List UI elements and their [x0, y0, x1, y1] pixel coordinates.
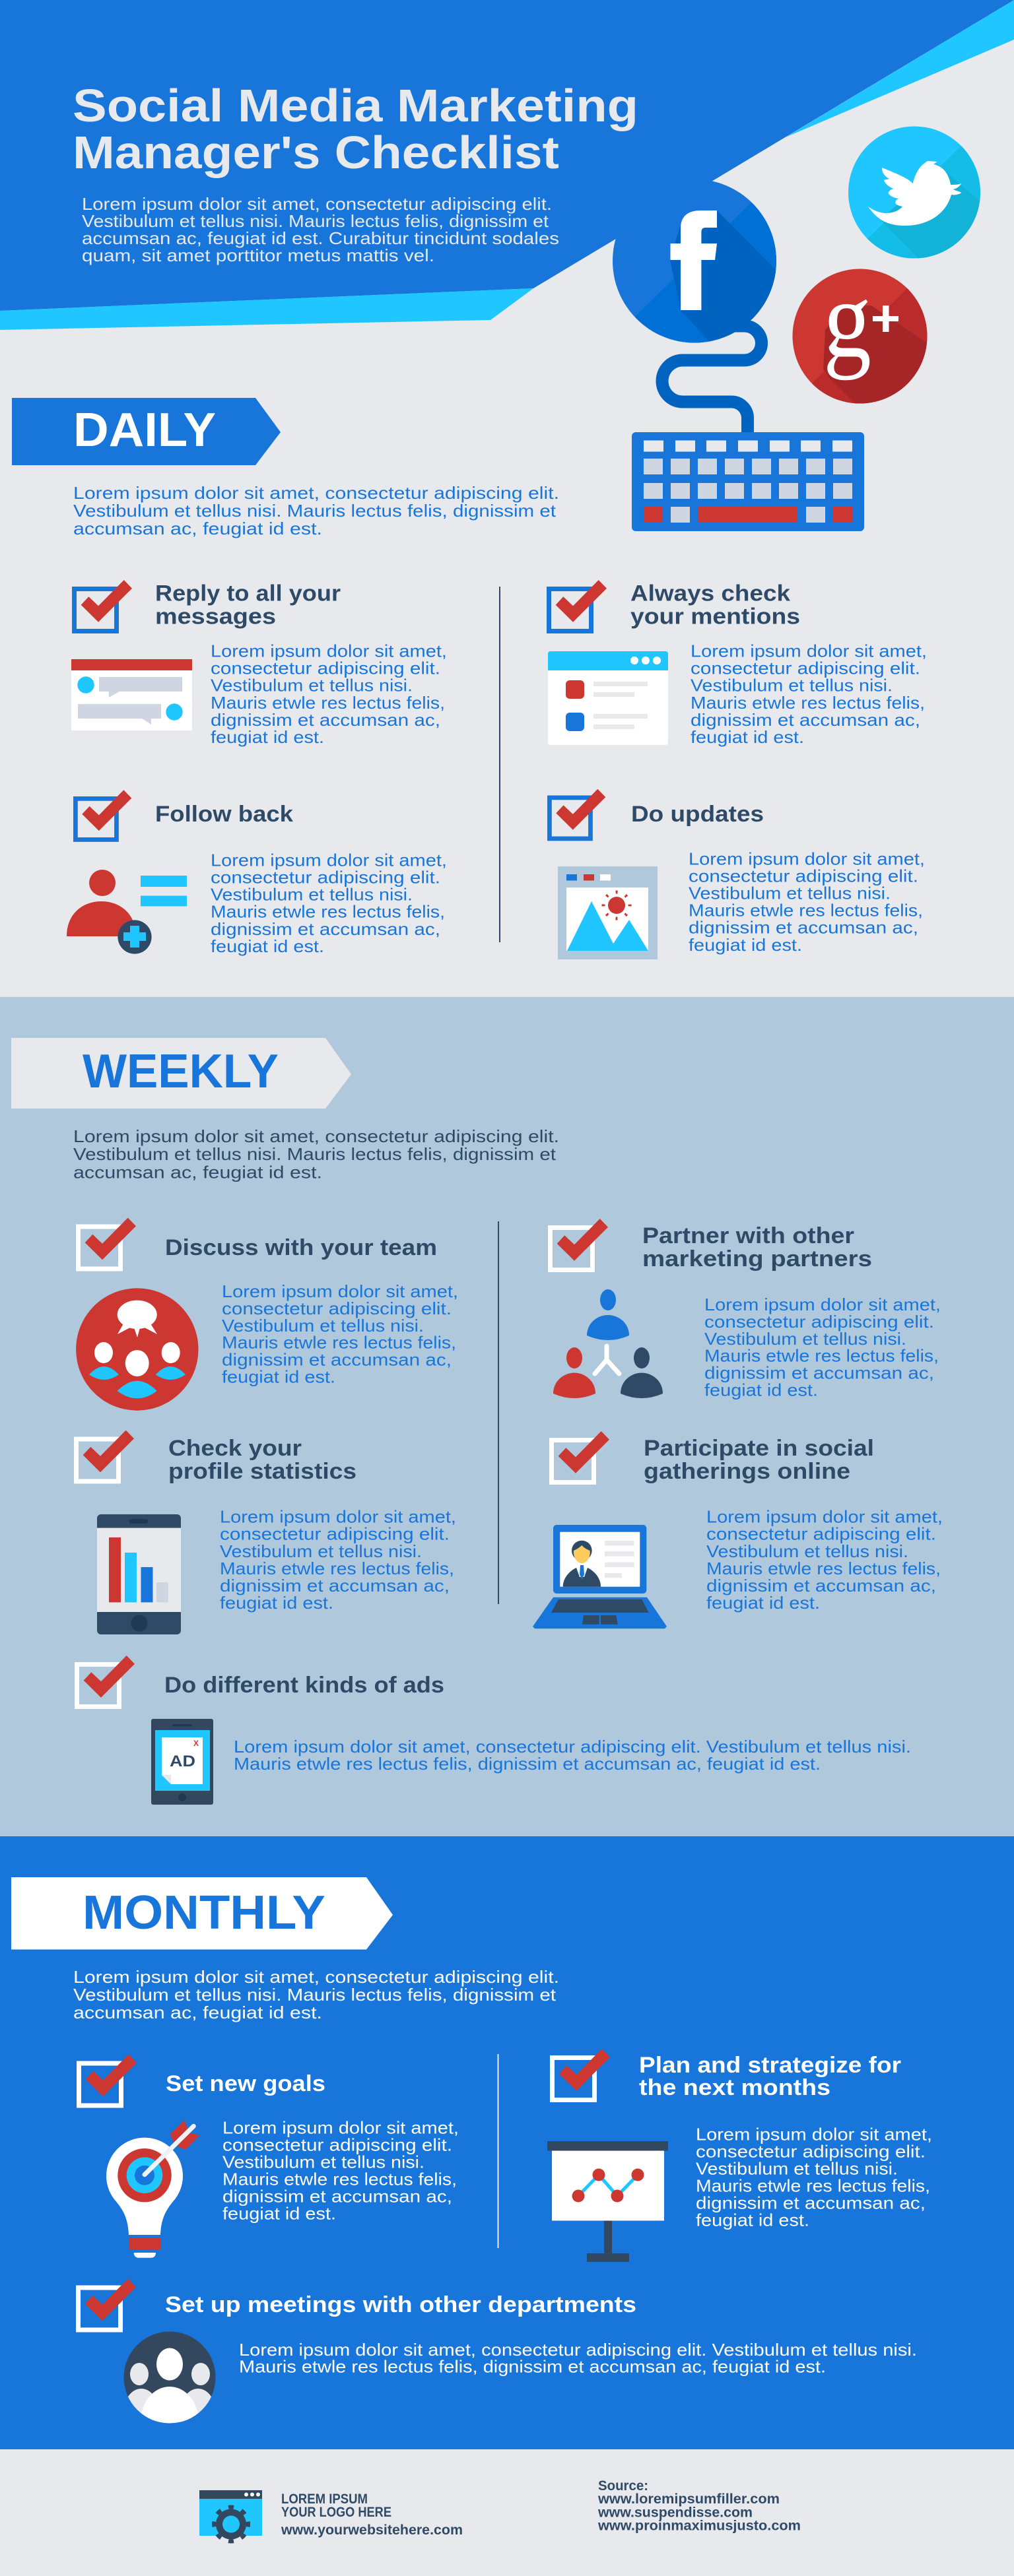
heading: Follow back [155, 802, 293, 827]
item: do updates [549, 789, 925, 959]
weekly intro text: accumsan ac, feugiat id est. [73, 1163, 322, 1182]
body text: Mauris etwle res lectus felis, [211, 902, 445, 922]
heading: Set new goals [166, 2071, 325, 2096]
daily intro text: accumsan ac, feugiat id est. [73, 519, 322, 538]
banner: weekly [11, 1038, 351, 1109]
title [73, 80, 638, 178]
body text: feugiat id est. [222, 2204, 336, 2224]
body text: Lorem ipsum dolor sit amet, [211, 850, 447, 870]
heading: gatherings online [644, 1459, 850, 1484]
body text: Mauris etwle res lectus felis, [220, 1559, 454, 1578]
body text: dignissim et accumsan ac, [211, 919, 440, 939]
title: Manager's Checklist [73, 127, 559, 178]
body text: Lorem ipsum dolor sit amet, consectetur adipiscing elit. Vestibulum et tellus nisi. [239, 2340, 917, 2360]
body text: Mauris etwle res lectus felis, [704, 1346, 939, 1366]
checkbox [78, 2279, 136, 2330]
body text: feugiat id est. [689, 935, 802, 955]
heading [168, 1436, 356, 1484]
checkbox [549, 580, 607, 631]
heading [639, 2053, 901, 2100]
monthly intro text: Lorem ipsum dolor sit amet, consectetur adipiscing elit. [73, 1967, 559, 1987]
heading: Do different kinds of ads [164, 1673, 444, 1698]
body text [704, 1295, 941, 1400]
icon: chat window [71, 659, 192, 730]
header intro text: accumsan ac, feugiat id est. Curabitur tincidunt sodales [82, 228, 559, 248]
body text: feugiat id est. [691, 727, 804, 747]
icon: partners network [553, 1289, 663, 1398]
icon: logo gear window [199, 2490, 262, 2542]
heading: Check your [168, 1436, 302, 1461]
heading: Partner with other [642, 1223, 854, 1248]
weekly intro text [73, 1126, 559, 1182]
body text: Lorem ipsum dolor sit amet, [704, 1295, 941, 1314]
heading [644, 1436, 874, 1484]
body text: Lorem ipsum dolor sit amet, [691, 641, 927, 661]
item: set up meetings with other departments [76, 2279, 915, 2423]
icon: phone with ad: X [193, 1739, 199, 1748]
icon: laptop with profile [533, 1525, 667, 1628]
header blue shape [0, 0, 1014, 311]
body text: Lorem ipsum dolor sit amet, [222, 2118, 459, 2138]
weekly intro text: Vestibulum et tellus nisi. Mauris lectus felis, dignissim et [73, 1144, 557, 1164]
banner: daily: DAILY [73, 404, 216, 457]
body text: dignissim et accumsan ac, [222, 2187, 452, 2206]
logo text [281, 2492, 463, 2538]
daily intro text [73, 483, 559, 538]
header cyan accent bottom [0, 288, 533, 330]
body text: dignissim et accumsan ac, [704, 1363, 934, 1383]
body text: Lorem ipsum dolor sit amet, [706, 1507, 943, 1527]
panel: weekly section [0, 997, 1014, 1836]
body text: Mauris etwle res lectus felis, [211, 693, 445, 713]
daily intro text: Vestibulum et tellus nisi. Mauris lectus felis, dignissim et [73, 501, 557, 521]
body text: Lorem ipsum dolor sit amet, [222, 1281, 458, 1301]
source list [597, 2478, 801, 2534]
checkbox [78, 1218, 136, 1269]
body text: consectetur adipiscing elit. [706, 1524, 936, 1544]
body text: Mauris etwle res lectus felis, [706, 1559, 941, 1578]
banner: monthly [11, 1877, 393, 1949]
heading: the next months [639, 2075, 830, 2100]
body text: consectetur adipiscing elit. [220, 1524, 450, 1544]
monthly intro text: accumsan ac, feugiat id est. [73, 2003, 322, 2022]
item: check your profile statistics [77, 1431, 456, 1634]
logo text: www.yourwebsitehere.com [281, 2523, 463, 2538]
body text: dignissim et accumsan ac, [696, 2193, 926, 2213]
icon: app window [548, 651, 668, 745]
icon: keyboard [632, 432, 864, 531]
item: do different kinds of ads [77, 1656, 911, 1805]
body text: feugiat id est. [211, 727, 324, 747]
icon: google plus: g [823, 258, 871, 381]
icon: facebook [613, 181, 776, 343]
heading: profile statistics [168, 1459, 356, 1484]
header intro text: Vestibulum et tellus nisi. Mauris lectus felis, dignissim et [82, 211, 549, 231]
banner: daily [12, 398, 281, 465]
body text [696, 2125, 932, 2230]
body text: Mauris etwle res lectus felis, [696, 2176, 930, 2196]
icon: phone with bar chart [97, 1514, 181, 1634]
body text: Lorem ipsum dolor sit amet, [220, 1507, 456, 1527]
heading: Set up meetings with other departments [165, 2292, 636, 2317]
body text: Mauris etwle res lectus felis, dignissim et accumsan ac, feugiat id est. [234, 1754, 821, 1774]
source list: www.proinmaximusjusto.com [597, 2518, 801, 2534]
body text: Mauris etwle res lectus felis, [691, 693, 925, 713]
body text [222, 2118, 459, 2224]
item: set new goals [79, 2055, 459, 2258]
body text: feugiat id est. [696, 2210, 809, 2230]
body text: consectetur adipiscing elit. [691, 659, 920, 678]
body text: Vestibulum et tellus nisi. [222, 2152, 424, 2172]
heading: Discuss with your team [165, 1235, 437, 1260]
weekly intro text: Lorem ipsum dolor sit amet, consectetur adipiscing elit. [73, 1126, 559, 1146]
checkbox [79, 2055, 137, 2106]
body text: Vestibulum et tellus nisi. [211, 885, 413, 905]
item: participate in social gatherings online [533, 1431, 943, 1628]
body text: Lorem ipsum dolor sit amet, [696, 2125, 932, 2144]
heading: marketing partners [642, 1246, 872, 1272]
header intro text [82, 194, 559, 265]
panel: monthly section [0, 1836, 1014, 2457]
panel: footer [0, 2449, 1014, 2576]
source list: www.loremipsumfiller.com [597, 2492, 780, 2507]
source list: www.suspendisse.com [597, 2505, 753, 2521]
header intro text: Lorem ipsum dolor sit amet, consectetur adipiscing elit. [82, 194, 552, 214]
heading: Do updates [631, 802, 764, 827]
icon: google plus [792, 269, 927, 404]
heading: messages [155, 604, 276, 629]
item: plan and strategize [547, 2049, 932, 2262]
body text: dignissim et accumsan ac, [220, 1576, 450, 1595]
icon: phone with ad [151, 1719, 213, 1805]
banner: weekly: WEEKLY [83, 1045, 279, 1098]
icon: keyboard cable [662, 326, 762, 434]
heading: Participate in social [644, 1436, 874, 1461]
checkbox [75, 790, 131, 839]
body text [691, 641, 927, 747]
banner: monthly: MONTHLY [83, 1886, 325, 1939]
body text: Vestibulum et tellus nisi. [222, 1316, 424, 1336]
checkbox [77, 1656, 135, 1706]
body text: feugiat id est. [704, 1380, 818, 1400]
body text: dignissim et accumsan ac, [691, 710, 920, 730]
body text: feugiat id est. [706, 1593, 820, 1613]
icon: twitter [848, 127, 980, 259]
body text: Lorem ipsum dolor sit amet, consectetur adipiscing elit. Vestibulum et tellus nisi. [234, 1737, 911, 1756]
body text [234, 1737, 911, 1774]
checkbox [552, 2049, 610, 2100]
heading [155, 581, 341, 629]
body text [689, 849, 925, 955]
icon: presentation board [547, 2141, 668, 2262]
heading: Always check [630, 581, 790, 606]
body text [211, 850, 447, 956]
body text: Mauris etwle res lectus felis, dignissim et accumsan ac, feugiat id est. [239, 2357, 826, 2377]
heading: Reply to all your [155, 581, 341, 606]
body text: dignissim et accumsan ac, [211, 710, 440, 730]
body text: feugiat id est. [220, 1593, 333, 1613]
monthly intro text: Vestibulum et tellus nisi. Mauris lectus felis, dignissim et [73, 1985, 557, 2005]
checkbox [549, 789, 605, 839]
body text [239, 2340, 917, 2377]
checkbox [77, 1431, 134, 1481]
body text [211, 641, 447, 747]
title: Social Media Marketing [73, 80, 638, 131]
body text: consectetur adipiscing elit. [696, 2142, 926, 2162]
header intro text: quam, sit amet porttitor metus mattis vel. [82, 245, 434, 265]
checkbox [74, 580, 132, 631]
body text [222, 1281, 458, 1387]
item: always check your mentions [548, 580, 927, 747]
body text: Vestibulum et tellus nisi. [704, 1329, 906, 1349]
body text: Mauris etwle res lectus felis, [222, 2170, 457, 2189]
icon: team discussion [76, 1288, 198, 1411]
icon: department team [124, 2332, 215, 2423]
body text: Lorem ipsum dolor sit amet, [689, 849, 925, 868]
checkbox [551, 1219, 608, 1270]
panel: header and daily section [0, 0, 1014, 997]
body text: Mauris etwle res lectus felis, [222, 1333, 456, 1353]
checkbox [552, 1431, 609, 1482]
body text: consectetur adipiscing elit. [222, 1299, 452, 1318]
body text: feugiat id est. [211, 936, 324, 956]
icon: phone with ad: AD [170, 1753, 195, 1770]
body text: Vestibulum et tellus nisi. [706, 1541, 908, 1561]
body text: consectetur adipiscing elit. [689, 866, 918, 886]
daily intro text: Lorem ipsum dolor sit amet, consectetur adipiscing elit. [73, 483, 559, 503]
source list: Source: [598, 2478, 648, 2494]
icon: picture post [558, 866, 658, 959]
body text: Vestibulum et tellus nisi. [220, 1541, 422, 1561]
icon: add person [67, 870, 187, 954]
logo text: YOUR LOGO HERE [281, 2505, 391, 2520]
body text: dignissim et accumsan ac, [222, 1350, 452, 1370]
body text: dignissim et accumsan ac, [689, 918, 918, 938]
body text: consectetur adipiscing elit. [211, 868, 440, 887]
heading: your mentions [630, 604, 800, 629]
monthly intro text [73, 1967, 559, 2022]
item: discuss with your team [76, 1218, 458, 1411]
logo text: LOREM IPSUM [281, 2492, 368, 2507]
heading [642, 1223, 872, 1272]
body text: consectetur adipiscing elit. [222, 2135, 452, 2155]
heading [630, 581, 800, 629]
heading: Plan and strategize for [639, 2053, 901, 2078]
body text: Vestibulum et tellus nisi. [691, 676, 893, 695]
body text: consectetur adipiscing elit. [211, 659, 440, 678]
item: reply to all your messages [71, 580, 447, 747]
body text: dignissim et accumsan ac, [706, 1576, 936, 1595]
body text [706, 1507, 943, 1613]
item: partner with other marketing partners [551, 1219, 941, 1400]
item: follow back [67, 790, 447, 956]
body text: Vestibulum et tellus nisi. [211, 676, 413, 695]
body text [220, 1507, 456, 1613]
body text: Lorem ipsum dolor sit amet, [211, 641, 447, 661]
header cyan accent top right [786, 0, 1014, 137]
body text: Mauris etwle res lectus felis, [689, 901, 923, 920]
body text: Vestibulum et tellus nisi. [696, 2159, 898, 2179]
icon: target light bulb [106, 2120, 200, 2258]
body text: consectetur adipiscing elit. [704, 1312, 934, 1332]
body text: feugiat id est. [222, 1367, 335, 1387]
body text: Vestibulum et tellus nisi. [689, 884, 891, 903]
